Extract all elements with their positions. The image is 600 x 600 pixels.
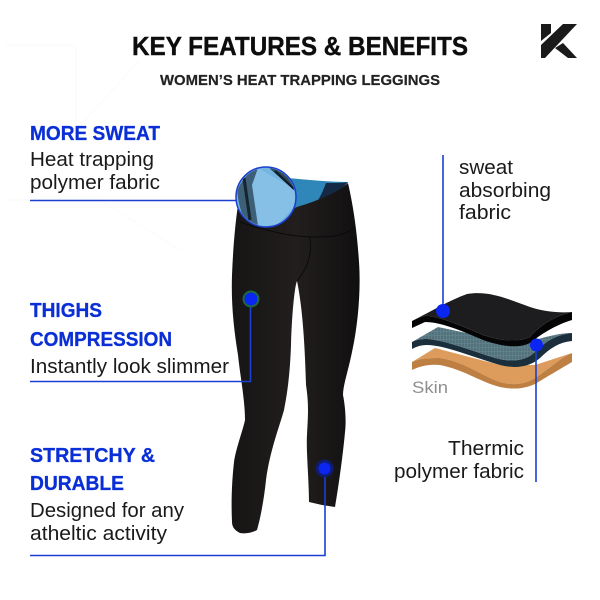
text block: stretchy and durable: DURABLE <box>30 473 124 495</box>
text: sweat absorbing fabric: absorbing <box>459 180 551 202</box>
layer: mesh <box>412 327 572 367</box>
leggings <box>232 178 360 533</box>
dot: thigh <box>242 290 260 308</box>
waistband seam <box>240 222 355 237</box>
icon: K logo <box>541 24 577 58</box>
text block: more sweat: MORE SWEAT <box>30 123 160 145</box>
text: thermic polymer fabric: Thermic <box>448 438 524 460</box>
inner waistband <box>285 178 348 209</box>
text: sweat absorbing fabric: sweat <box>459 157 513 179</box>
layer: black top <box>412 293 572 346</box>
text block: stretchy and durable: Designed for any <box>30 500 184 522</box>
text block: more sweat <box>30 123 160 194</box>
text block: thighs compression: THIGHS <box>30 300 102 322</box>
text block: thighs compression <box>30 300 229 378</box>
label: skin: Skin <box>412 378 448 397</box>
dot: top layer <box>436 304 450 318</box>
text block: thighs compression: Instantly look slimmer <box>30 356 229 378</box>
line: thermic connector <box>535 345 537 482</box>
text block: stretchy and durable <box>30 445 184 545</box>
dot: calf <box>316 460 334 478</box>
dot: mesh layer <box>530 338 543 352</box>
subtitle: WOMEN’S HEAT TRAPPING LEGGINGS <box>160 72 440 89</box>
text block: stretchy and durable: STRETCHY & <box>30 445 155 467</box>
title: KEY FEATURES & BENEFITS <box>132 31 468 61</box>
text: sweat absorbing fabric <box>459 157 551 224</box>
text: sweat absorbing fabric: fabric <box>459 202 511 224</box>
lines: leggings callout connectors <box>30 200 325 556</box>
text block: stretchy and durable: atheltic activity <box>30 523 167 545</box>
text: thermic polymer fabric <box>394 438 524 483</box>
text block: more sweat: Heat trapping <box>30 149 154 171</box>
text: thermic polymer fabric: polymer fabric <box>394 461 524 483</box>
leggings body <box>232 183 360 533</box>
layer: skin <box>412 348 572 389</box>
inner waistband shadow <box>318 182 348 200</box>
fabric layers diagram <box>412 293 572 397</box>
text block: more sweat: polymer fabric <box>30 172 160 194</box>
inset: fabric lining circle <box>236 167 296 227</box>
text block: thighs compression: COMPRESSION <box>30 329 172 351</box>
line: sweat absorbing connector <box>442 155 444 311</box>
